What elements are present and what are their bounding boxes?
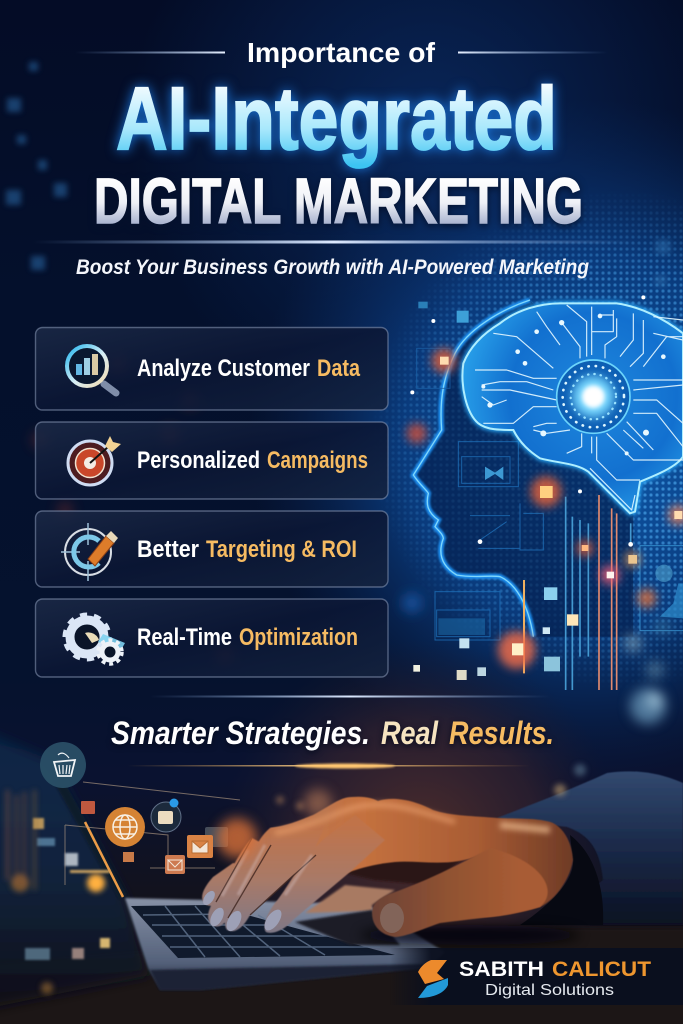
face interface panels	[417, 348, 683, 640]
label: Analyze Customer	[137, 355, 310, 382]
label: Real-Time	[137, 624, 232, 651]
hand on keyboard	[201, 797, 580, 945]
desk surface	[0, 928, 683, 1024]
thumb nail	[380, 903, 404, 933]
glowing hub	[557, 360, 630, 433]
label: Campaigns	[267, 447, 368, 474]
connector lines	[65, 782, 240, 885]
circuit traces	[475, 305, 683, 510]
icon: dark badge	[151, 798, 181, 832]
finger nails	[201, 889, 285, 934]
heading: Importance of: Importance of	[247, 37, 436, 68]
label: Better	[137, 536, 199, 563]
tagline: Results.	[449, 715, 554, 751]
divider	[33, 240, 635, 244]
icon: envelopes	[81, 801, 228, 874]
brand name: SABITH	[459, 958, 544, 981]
palm rest and trackpad	[305, 885, 395, 913]
keyboard	[131, 905, 395, 958]
tagline: Real	[381, 715, 439, 751]
icon: magnifier with bars	[67, 346, 116, 393]
brain	[462, 303, 683, 513]
blurred data lights	[6, 688, 666, 994]
label: Personalized	[137, 447, 260, 474]
brand name: CALICUT	[552, 958, 651, 981]
icon: crosshair with pencil	[61, 523, 118, 581]
face silhouette	[413, 300, 633, 637]
palm shadow	[340, 845, 480, 885]
back of hand	[270, 797, 573, 917]
panel: analyze customer data	[36, 328, 388, 410]
panel: personalized campaigns	[36, 422, 388, 499]
panel: better targeting and ROI	[36, 511, 388, 587]
icon: shopping basket	[40, 742, 86, 788]
circuit nodes	[481, 314, 666, 455]
logo mark	[418, 960, 448, 998]
label: Optimization	[239, 624, 358, 651]
label: Data	[317, 355, 361, 382]
laptop	[0, 730, 445, 1010]
icon: gears and gauge	[65, 615, 125, 664]
finger separators and light	[216, 838, 316, 918]
sleeve	[497, 771, 683, 925]
floating marketing icons	[6, 688, 666, 994]
gold divider	[126, 764, 531, 768]
heading: AI-Integrated: AI-Integrated	[116, 68, 557, 168]
tagline: Smarter Strategies.	[111, 715, 370, 751]
laptop base	[125, 898, 445, 990]
brain and face illustration	[413, 300, 683, 690]
icon: target with dart	[68, 436, 121, 485]
icon: globe	[105, 807, 145, 847]
brand logo block	[390, 948, 683, 1005]
data lines	[524, 495, 631, 690]
label: Targeting & ROI	[206, 536, 357, 563]
panel: real-time optimization	[36, 599, 388, 677]
glowing data lights	[407, 349, 683, 669]
highlights	[275, 805, 550, 833]
soft bokeh	[402, 593, 669, 678]
subtitle: Boost Your Business Growth with AI-Powered Marketing	[76, 256, 589, 279]
laptop lid	[0, 730, 150, 1010]
fingers	[202, 815, 385, 933]
brand descriptor: Digital Solutions	[485, 982, 614, 999]
glowing data squares	[410, 295, 682, 680]
thumb	[372, 848, 548, 937]
top tagline divider	[150, 696, 550, 698]
